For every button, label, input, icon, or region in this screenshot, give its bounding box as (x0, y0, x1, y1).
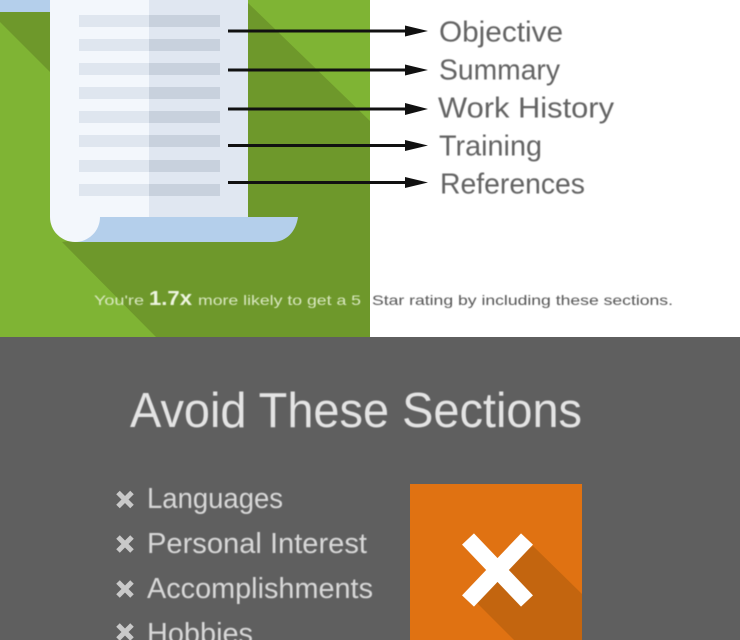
icon: x personal interest (118, 537, 132, 551)
top roll shadow (0, 12, 50, 72)
callout: rating statistic on white: Star rating by including these sections. (372, 292, 673, 308)
panel: avoid these sections (0, 337, 740, 640)
callout: rating statistic on green (94, 288, 361, 310)
icon: x hobbies (118, 625, 132, 639)
top roll edge (0, 0, 52, 12)
arrow: references (228, 177, 428, 188)
heading: Avoid These Sections (130, 384, 582, 438)
label: summary: Summary (439, 54, 560, 86)
arrow: summary (228, 64, 428, 76)
arrows (228, 26, 428, 188)
icon: x languages (118, 492, 132, 506)
panel: recommended sections (0, 0, 740, 337)
icon: resume scroll (0, 0, 370, 337)
callout lead-in: You're (94, 292, 144, 308)
icon: x accomplishments (118, 582, 132, 596)
label: objective: Objective (439, 16, 563, 48)
white x (468, 539, 527, 601)
list of sections to avoid (118, 483, 373, 640)
label: languages: Languages (147, 483, 283, 515)
label: references: References (440, 168, 585, 200)
arrow: work history (228, 103, 428, 115)
green panel (0, 0, 370, 337)
orange square (410, 484, 582, 640)
x mark icons (118, 492, 132, 639)
icon: orange x square (410, 484, 582, 640)
paper bottom fold (75, 217, 298, 242)
callout remainder: more likely to get a 5 (198, 292, 361, 308)
white background (0, 0, 740, 337)
callout figure: 1.7x (149, 288, 192, 310)
arrow: training (228, 140, 428, 151)
dark background (0, 337, 740, 640)
arrow: objective (228, 26, 428, 36)
label: work history: Work History (438, 92, 615, 124)
text lines right (149, 15, 220, 196)
label: training: Training (439, 130, 542, 162)
paper left half with curl (50, 0, 149, 242)
text lines left (79, 15, 149, 196)
label: accomplishments: Accomplishments (147, 573, 373, 605)
x long shadow (476, 546, 582, 640)
section labels (438, 16, 615, 200)
scroll long shadow (62, 3, 370, 337)
paper right half (149, 0, 248, 217)
list labels (147, 483, 373, 640)
label: personal interest: Personal Interest (147, 528, 367, 560)
